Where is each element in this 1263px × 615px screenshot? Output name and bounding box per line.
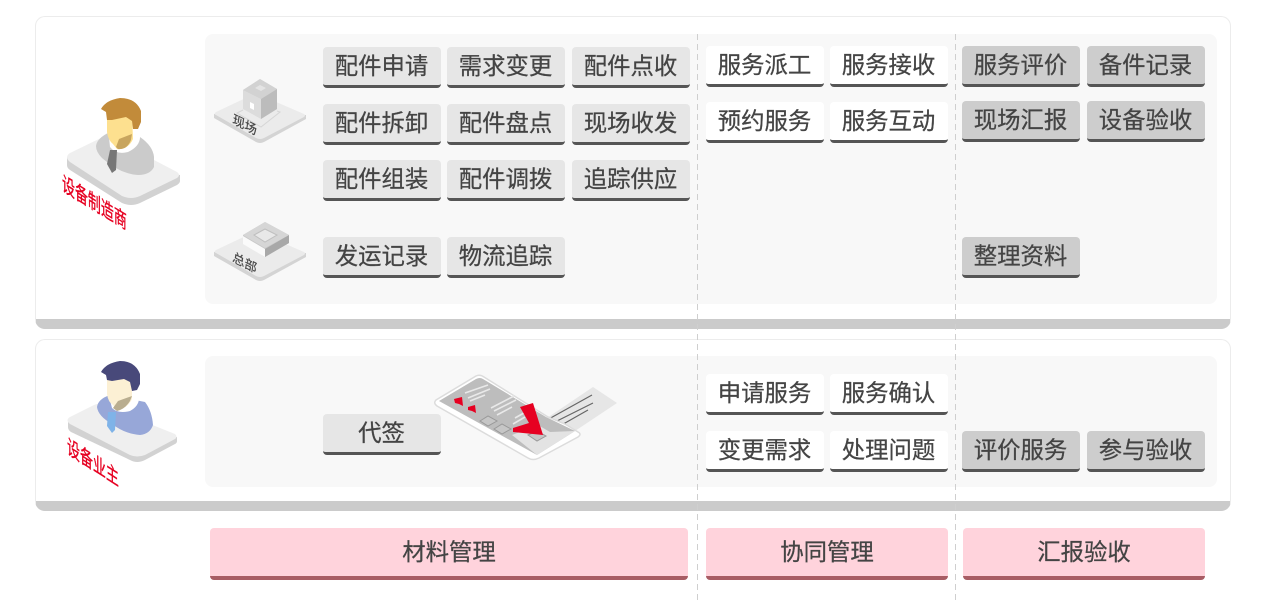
column divider: collaboration and acceptance	[955, 34, 956, 603]
label: headquarters: 总部	[232, 249, 258, 276]
owner task buttons: 变更需求	[718, 437, 811, 463]
icon: site building	[214, 79, 306, 143]
owner task buttons: 参与验收	[1099, 437, 1192, 463]
owner task buttons	[323, 380, 1205, 472]
icon: equipment owner figure	[67, 361, 177, 491]
bottom category: reporting and acceptance: 汇报验收	[1037, 539, 1131, 565]
column divider: materials and collaboration	[697, 34, 698, 603]
owner task buttons: 代签	[358, 420, 405, 446]
manufacturer task buttons: 服务派工	[718, 52, 811, 78]
label: equipment manufacturer: 设备制造商	[62, 172, 127, 234]
manufacturer task buttons: 整理资料	[974, 243, 1067, 269]
owner task buttons: 评价服务	[974, 437, 1067, 463]
bottom category: collaborative management	[706, 528, 948, 580]
manufacturer task buttons: 物流追踪	[459, 243, 552, 269]
manufacturer task buttons: 配件盘点	[459, 110, 552, 136]
icon: headquarters building	[214, 222, 306, 281]
manufacturer task buttons: 预约服务	[718, 108, 811, 134]
manufacturer task buttons: 设备验收	[1099, 107, 1192, 133]
manufacturer task buttons: 需求变更	[459, 53, 552, 79]
manufacturer task buttons: 配件调拨	[459, 166, 552, 192]
manufacturer task buttons: 服务互动	[842, 108, 935, 134]
manufacturer task buttons: 配件组装	[335, 166, 428, 192]
manufacturer task buttons: 服务接收	[842, 52, 935, 78]
manufacturer task buttons: 配件拆卸	[335, 110, 428, 136]
bottom category: collaborative management: 协同管理	[780, 539, 874, 565]
label: site: 现场	[232, 111, 258, 138]
panel: equipment manufacturer	[35, 16, 1231, 329]
bottom category: reporting and acceptance	[963, 528, 1205, 580]
manufacturer task buttons: 发运记录	[335, 243, 428, 269]
icon: equipment manufacturer figure	[62, 98, 180, 234]
manufacturer task buttons: 配件申请	[335, 53, 428, 79]
manufacturer task buttons	[323, 46, 1205, 278]
owner task buttons: 服务确认	[842, 380, 935, 406]
manufacturer task buttons: 配件点收	[584, 53, 677, 79]
manufacturer task buttons: 现场收发	[584, 110, 677, 136]
bottom category: materials management	[210, 528, 688, 580]
bottom category: materials management: 材料管理	[402, 539, 496, 565]
manufacturer task buttons: 服务评价	[974, 52, 1067, 78]
icon: phone with signed checklist	[435, 375, 617, 460]
manufacturer task buttons: 备件记录	[1099, 52, 1192, 78]
panel: owner task area	[205, 356, 1217, 487]
manufacturer task buttons: 现场汇报	[974, 107, 1067, 133]
owner task buttons: 处理问题	[842, 437, 935, 463]
manufacturer task buttons: 追踪供应	[584, 166, 677, 192]
owner task buttons: 申请服务	[718, 380, 811, 406]
label: equipment owner: 设备业主	[67, 435, 119, 491]
panel: equipment owner	[35, 339, 1231, 511]
panel: manufacturer task area	[205, 34, 1217, 304]
